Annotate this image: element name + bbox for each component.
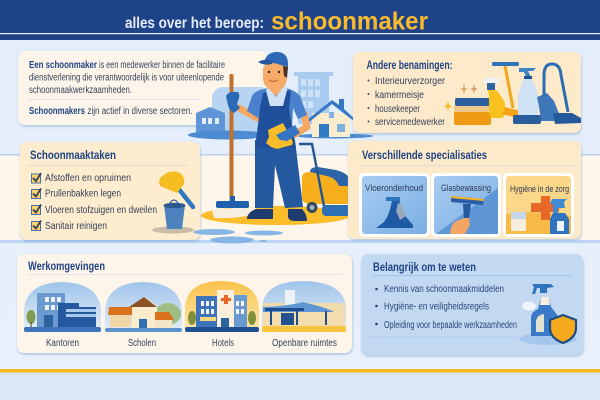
- task checklist: Prullenbakken legen: [45, 188, 121, 200]
- intro text: zijn actief in diverse sectoren.: [88, 106, 192, 117]
- tile: hotels: [185, 281, 259, 349]
- key points: [370, 284, 520, 338]
- heading: Andere benamingen:: [366, 60, 452, 72]
- title: schoonmaker: [271, 8, 428, 36]
- icon: cleaning supplies: [444, 62, 581, 125]
- panel: belangrijk om te weten: [361, 254, 583, 355]
- label: Hotels: [212, 338, 234, 349]
- heading: Belangrijk om te weten: [373, 262, 476, 274]
- card: hygiene in de zorg: Hygiëne in de zorg: [510, 184, 569, 194]
- task checklist: [32, 173, 157, 232]
- middle band: [0, 154, 600, 243]
- key points: Opleiding voor bepaalde werkzaamheden: [384, 320, 517, 331]
- title: [125, 8, 428, 36]
- panel: andere benamingen: [353, 52, 581, 133]
- intro text: Schoonmakers: [29, 106, 85, 117]
- intro text: Een schoonmaker: [29, 60, 97, 71]
- worker figure: [226, 52, 307, 221]
- heading: Werkomgevingen: [28, 261, 105, 273]
- heading: Schoonmaaktaken: [30, 150, 116, 162]
- tile: openbare ruimtes: [262, 281, 346, 349]
- heading: Verschillende specialisaties: [362, 150, 487, 162]
- name list: [368, 76, 446, 128]
- intro text: [29, 60, 225, 117]
- overalls bib: [255, 90, 296, 148]
- intro text: schoonmaakwerkzaamheden.: [29, 85, 132, 96]
- name list: Interieurverzorger: [375, 76, 446, 87]
- name list: kamermeisje: [375, 90, 424, 101]
- icon: spray bottle and shield: [519, 284, 577, 345]
- header banner: [0, 0, 600, 40]
- label: Openbare ruimtes: [272, 338, 337, 349]
- title: alles over het beroep:: [125, 15, 264, 32]
- panel: schoonmaaktaken: [20, 142, 200, 240]
- tile: scholen: [105, 282, 182, 349]
- name list: servicemedewerker: [375, 117, 446, 128]
- shirt and sleeves: [247, 87, 307, 128]
- tile: kantoren: [24, 282, 101, 349]
- card: vloeronderhoud: Vloeronderhoud: [365, 183, 423, 193]
- card: glasbewassing: [432, 174, 500, 236]
- key points: Kennis van schoonmaakmiddelen: [384, 284, 504, 295]
- legs: [255, 140, 303, 208]
- right glove: [276, 125, 300, 141]
- card: hygiene in de zorg: [504, 174, 573, 236]
- card: vloeronderhoud: [360, 174, 429, 236]
- key points: Hygiëne- en veiligheidsregels: [384, 302, 489, 312]
- label: Kantoren: [46, 338, 79, 349]
- intro text: dienstverlening die verantwoordelijk is voor uiteenlopende: [29, 72, 224, 84]
- mop: [212, 74, 257, 218]
- floor spot and puddles: [193, 206, 351, 244]
- footer strip: [0, 369, 600, 400]
- left glove: [226, 92, 240, 113]
- forearms: [239, 108, 257, 118]
- label: Scholen: [128, 338, 156, 349]
- name list: housekeeper: [375, 104, 421, 115]
- task checklist: Afstoffen en opruimen: [45, 173, 131, 184]
- head: [263, 62, 287, 90]
- card: glasbewassing: Glasbewassing: [441, 183, 491, 193]
- scene: buildings behind the worker: [188, 72, 373, 140]
- task checklist: Vloeren stofzuigen en dweilen: [45, 205, 157, 216]
- yellow cloth: [266, 123, 293, 149]
- panel: intro: [18, 51, 268, 125]
- panel: verschillende specialisaties: [348, 141, 581, 239]
- icon: vacuum cleaner: [299, 144, 351, 216]
- icon: duster and bucket: [152, 171, 194, 234]
- collar: [266, 85, 288, 106]
- task checklist: Sanitair reinigen: [45, 221, 107, 232]
- intro text: is een medewerker binnen de facilitaire: [99, 60, 225, 71]
- panel: werkomgevingen: [17, 254, 352, 353]
